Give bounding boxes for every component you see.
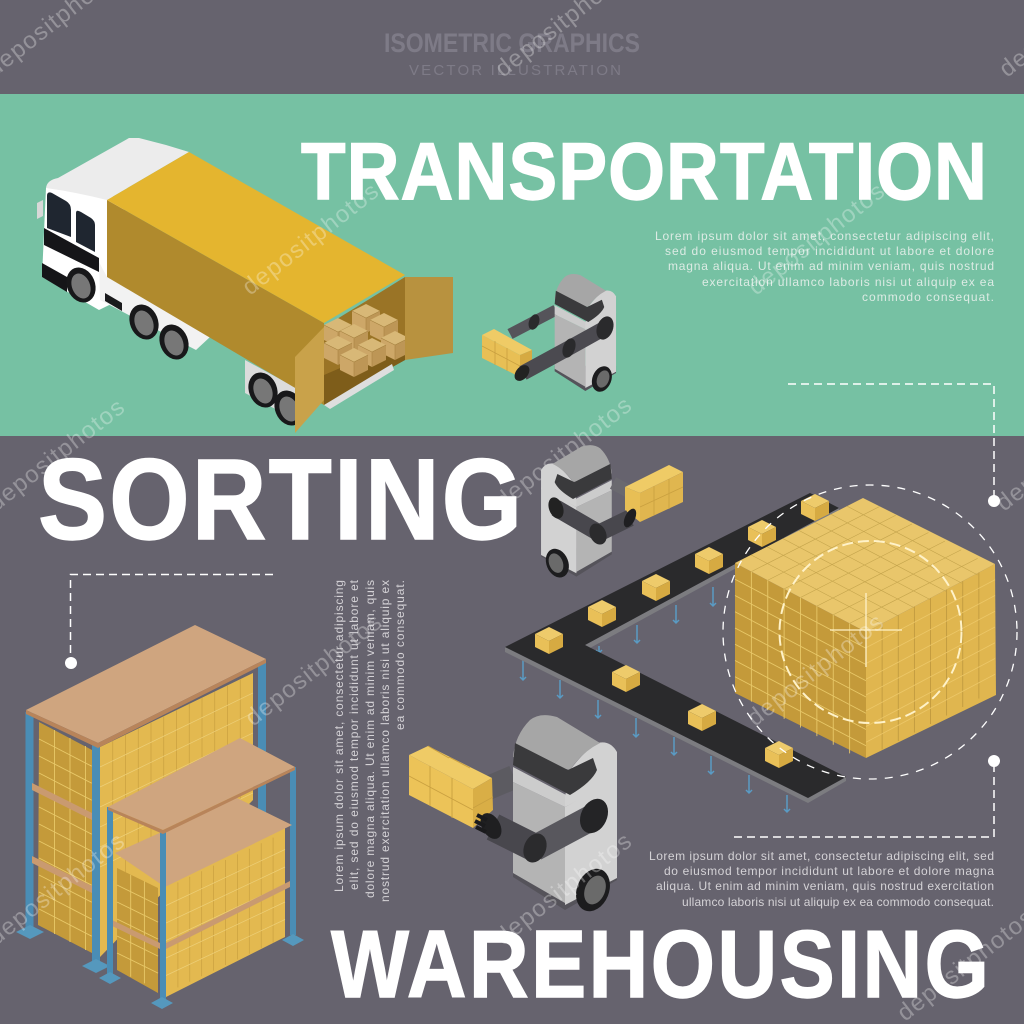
text block: rotated: Lorem ipsum dolor sit amet, consectetur adipiscing [332, 580, 346, 892]
conveyor belt [505, 493, 846, 812]
big parcel cube [735, 498, 996, 762]
connector: lower right [732, 755, 1000, 837]
text block: warehousing: aliqua. Ut enim ad minim veniam, quis nostrud exercitation [656, 879, 994, 893]
warehouse racks [16, 625, 304, 1009]
doors [295, 277, 453, 433]
carried boxes [625, 465, 683, 522]
carried boxes [409, 746, 493, 828]
connector: top right [788, 384, 1000, 507]
heading: transportation: TRANSPORTATION [301, 126, 987, 217]
heading: sorting: SORTING [38, 436, 522, 564]
watermarks: depositphotos [743, 178, 890, 301]
cab [37, 138, 189, 310]
text block: transportation: exercitation ullamco laboris nisi ut aliquip ex ea [702, 275, 994, 289]
target circles and crosshair [723, 485, 1017, 779]
near arm [475, 794, 613, 866]
text block: transportation: Lorem ipsum dolor sit amet, consectetur adipiscing elit, [655, 229, 994, 243]
text block: rotated: elit, sed do eiusmod tempor incididunt ut labore et [347, 579, 361, 890]
title: isometric graphics [384, 28, 640, 79]
near arm [546, 495, 639, 547]
watermarks: depositphotos [490, 392, 637, 515]
text block: rotated [332, 579, 407, 902]
connector: warehouse [65, 574, 273, 669]
small rack [99, 738, 304, 1009]
watermarks: lower: depositphotos [742, 609, 889, 732]
text block: rotated: ea commodo consequat. [393, 580, 407, 730]
watermarks [0, 0, 1024, 517]
belt edge [505, 508, 846, 803]
text block: warehousing [649, 849, 994, 909]
far arm [613, 483, 628, 491]
near arm [512, 314, 617, 384]
watermarks: lower: depositphotos [240, 609, 387, 732]
text block: transportation [655, 229, 994, 304]
text block: warehousing: Lorem ipsum dolor sit amet, consectetur adipiscing elit, sed [649, 849, 994, 863]
text block: warehousing: do eiusmod tempor incididunt ut labore et dolore magna [664, 864, 994, 878]
large rack [16, 625, 266, 973]
far arm [510, 310, 556, 334]
title: isometric graphics: VECTOR ILLUSTRATION [409, 62, 621, 79]
far arm [488, 777, 514, 788]
watermarks: lower [0, 609, 1024, 1024]
heading: warehousing: WAREHOUSING [331, 910, 989, 1017]
truck [37, 138, 453, 433]
chassis [99, 262, 300, 422]
legs [520, 587, 790, 812]
cargo parcels [324, 304, 409, 377]
cargo box [107, 152, 405, 409]
robot: warehouse [409, 715, 617, 916]
teal band [0, 94, 1024, 436]
parcels on belt [535, 494, 829, 768]
wheels [61, 263, 309, 430]
watermarks: lower: depositphotos [490, 828, 637, 951]
title: isometric graphics: ISOMETRIC GRAPHICS [384, 28, 640, 58]
robot: sorting [541, 445, 683, 581]
text block: transportation: commodo consequat. [862, 290, 994, 304]
watermarks: depositphotos [237, 178, 384, 301]
robot: loading truck [482, 274, 617, 395]
text block: rotated: dolore magna aliqua. Ut enim ad minim veniam, quis [363, 580, 377, 898]
text block: warehousing: ullamco laboris nisi ut aliquip ex ea commodo consequat. [682, 895, 994, 909]
carried boxes [482, 329, 532, 377]
belt surface [505, 493, 846, 798]
text block: transportation: magna aliqua. Ut enim ad minim veniam, quis nostrud [668, 259, 994, 273]
text block: transportation: sed do eiusmod tempor incididunt ut labore et dolore [665, 244, 994, 258]
text block: rotated: nostrud exercitation ullamco laboris nisi ut aliquip ex [378, 580, 392, 902]
